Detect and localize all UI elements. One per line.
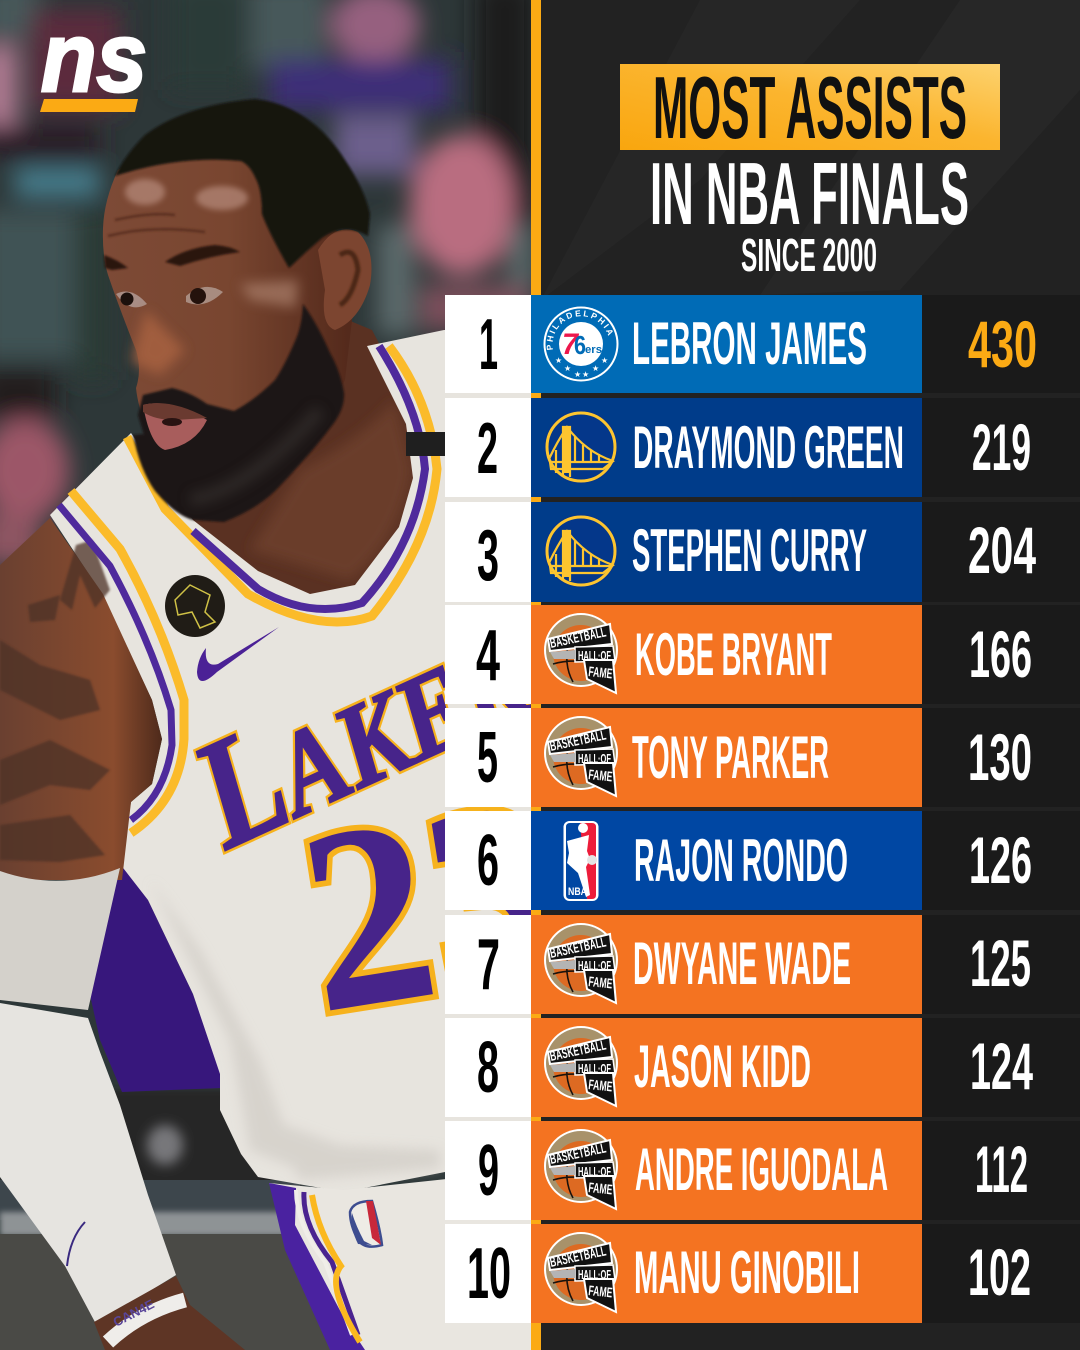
- icon: Hall of Fame logo: FAME: [588, 1179, 613, 1197]
- icon: Hall of Fame logo: BASKETBALL: [548, 1139, 608, 1167]
- icon: 76ers logo: PHILADELPHIA: [546, 310, 613, 350]
- icon: 76ers logo: ★: [574, 370, 581, 379]
- row 8: Jason Kidd: 8: [477, 1028, 499, 1108]
- memorial patch: [165, 575, 225, 637]
- row 6: Rajon Rondo: [445, 811, 1080, 910]
- icon: Hall of Fame logo: HALL·OF: [578, 1164, 611, 1179]
- icon: Hall of Fame logo: HALL·OF: [578, 958, 611, 973]
- row 6: Rajon Rondo: RAJON RONDO: [634, 827, 848, 894]
- row 1: LeBron James: 430: [968, 307, 1037, 381]
- neck: [192, 322, 413, 594]
- Nike swoosh: [197, 627, 279, 681]
- row 9: Andre Iguodala: 9: [478, 1131, 499, 1211]
- head: [103, 99, 371, 522]
- forehead creases: [108, 214, 205, 236]
- hair: [115, 99, 370, 268]
- icon: Hall of Fame logo: BASKETBALL: [548, 933, 608, 961]
- nose highlight: [132, 310, 185, 375]
- lips: [143, 403, 207, 450]
- accent: orange vertical bar: [531, 0, 541, 1350]
- row 2: Draymond Green: 219: [972, 410, 1031, 484]
- icon: 76ers logo: ★: [601, 356, 608, 365]
- brand logo: ns: ns: [41, 2, 147, 112]
- jersey body: [50, 330, 531, 1192]
- row 2: Draymond Green: 2: [477, 409, 498, 489]
- heading highlight box: [620, 64, 1000, 150]
- icon: Hall of Fame logo: HALL·OF: [578, 1061, 611, 1076]
- row 7: Dwyane Wade: 125: [970, 926, 1031, 1000]
- row 3: Stephen Curry: [445, 502, 1080, 602]
- row 8: Jason Kidd: [445, 1018, 1080, 1117]
- tattoo marks: [0, 540, 110, 862]
- icon: Hall of Fame logo: BASKETBALL: [548, 1036, 608, 1064]
- icon: 76ers logo: ★: [582, 370, 589, 379]
- row 1: LeBron James: [445, 295, 1037, 393]
- shorts: [269, 1170, 531, 1350]
- beard: [133, 304, 344, 522]
- photo: LeBron James in Lakers jersey: [0, 0, 531, 1350]
- row 5: Tony Parker: 130: [968, 720, 1032, 794]
- row 7: Dwyane Wade: [445, 915, 1080, 1014]
- jersey wordmark: Lakers: LAKERS: [167, 558, 603, 881]
- row 6: Rajon Rondo: 6: [477, 821, 499, 901]
- icon: Hall of Fame logo: [544, 1026, 618, 1106]
- row 7: Dwyane Wade: DWYANE WADE: [633, 930, 851, 997]
- icon: Hall of Fame logo: FAME: [588, 1282, 613, 1300]
- icon: Hall of Fame logo: [544, 613, 618, 693]
- icon: Hall of Fame logo: FAME: [588, 1076, 613, 1094]
- floor and court behind player: [0, 1090, 300, 1186]
- icon: 76ers logo: ★: [592, 364, 599, 373]
- icon: 76ers logo: 6: [574, 330, 586, 360]
- row 9: Andre Iguodala: 112: [975, 1132, 1028, 1206]
- icon: 76ers logo: [544, 306, 618, 382]
- jersey wordmark: Lakers: LAKERS: [167, 558, 603, 881]
- icon: Hall of Fame logo: [544, 1129, 618, 1209]
- black armband strip: [406, 432, 446, 456]
- jersey number: 23: [284, 743, 576, 1069]
- icon: Warriors logo: [544, 410, 618, 484]
- icon: Hall of Fame logo: [544, 923, 618, 1003]
- icon: 76ers logo: ers: [585, 344, 602, 356]
- row 3: Stephen Curry: 3: [477, 516, 499, 596]
- icon: Hall of Fame logo: BASKETBALL: [548, 1242, 608, 1270]
- ear: [318, 229, 372, 330]
- panel: right dark background: [531, 0, 1080, 1350]
- NBA logo on shorts: [350, 1201, 382, 1247]
- row 4: Kobe Bryant: KOBE BRYANT: [635, 621, 832, 688]
- blurred crowd background: [0, 0, 535, 1350]
- row 9: Andre Iguodala: [445, 1121, 1080, 1220]
- row 8: Jason Kidd: JASON KIDD: [634, 1033, 811, 1100]
- icon: Hall of Fame logo: [544, 1232, 618, 1312]
- icon: Hall of Fame logo: HALL·OF: [578, 1267, 611, 1282]
- icon: 76ers logo: ★: [564, 364, 571, 373]
- row 1: LeBron James: 1: [479, 305, 498, 385]
- icon: NBA logo: NBA: [568, 886, 587, 898]
- eyebrows: [104, 245, 240, 270]
- row 5: Tony Parker: TONY PARKER: [632, 724, 829, 791]
- row 4: Kobe Bryant: 4: [476, 616, 500, 696]
- icon: Hall of Fame logo: BASKETBALL: [548, 726, 608, 754]
- icon: Hall of Fame logo: FAME: [588, 973, 613, 991]
- icon: NBA logo: [564, 821, 598, 901]
- hand and wristband: [94, 1276, 245, 1350]
- icon: 76ers logo: ★: [555, 356, 562, 365]
- icon: Hall of Fame logo: FAME: [588, 663, 613, 681]
- row 3: Stephen Curry: 204: [968, 513, 1036, 587]
- row 4: Kobe Bryant: 166: [969, 617, 1032, 691]
- icon: 76ers logo: 7: [562, 328, 579, 361]
- forehead highlights: [125, 179, 248, 210]
- row 7: Dwyane Wade: 7: [477, 925, 500, 1005]
- subheading: SINCE 2000: [741, 229, 877, 281]
- icon: Hall of Fame logo: FAME: [588, 766, 613, 784]
- row 8: Jason Kidd: 124: [970, 1029, 1033, 1103]
- row 10: Manu Ginobili: 102: [968, 1235, 1031, 1309]
- teammate purple jersey behind arm: [90, 862, 222, 1092]
- icon: Warriors logo: [544, 514, 618, 588]
- compression sleeve: [0, 868, 176, 1324]
- icon: Hall of Fame logo: HALL·OF: [578, 751, 611, 766]
- hand and wristband: CAN4E: [111, 1296, 157, 1330]
- row 10: Manu Ginobili: 10: [467, 1234, 511, 1314]
- row 6: Rajon Rondo: 126: [969, 823, 1032, 897]
- jersey wordmark: Lakers: [192, 661, 531, 855]
- icon: Hall of Fame logo: HALL·OF: [578, 648, 611, 663]
- row 5: Tony Parker: 5: [477, 718, 498, 798]
- row 10: Manu Ginobili: [445, 1224, 1080, 1323]
- eyes: [116, 287, 223, 307]
- title block: [620, 58, 1000, 281]
- row 4: Kobe Bryant: [445, 605, 1080, 704]
- arm skin with tattoos: [0, 518, 162, 880]
- row 2: Draymond Green: [445, 398, 1080, 497]
- row 5: Tony Parker: [445, 708, 1080, 807]
- icon: Hall of Fame logo: [544, 716, 618, 796]
- icon: Hall of Fame logo: BASKETBALL: [548, 623, 608, 651]
- jersey piping: [59, 346, 437, 833]
- jersey folds: [173, 920, 443, 1187]
